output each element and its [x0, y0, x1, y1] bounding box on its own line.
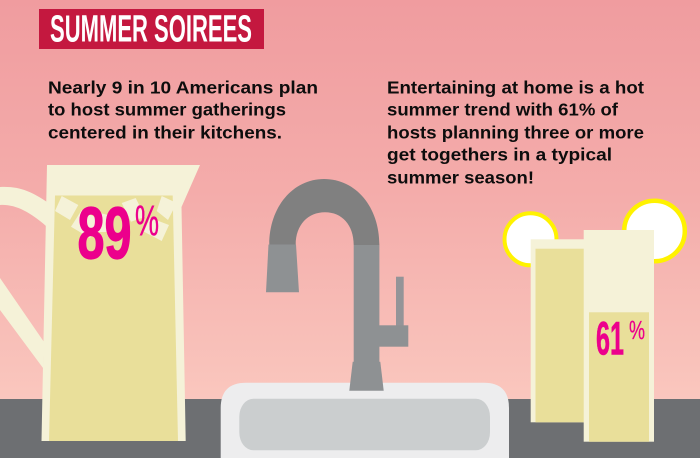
text block: 89 percent statement: Nearly 9 in 10 Americans plan — [48, 77, 318, 97]
title banner: SUMMER SOIREES — [50, 9, 252, 51]
text block: 89 percent statement — [48, 77, 318, 142]
sink — [221, 383, 509, 458]
stat: 89 percent: 89 — [78, 194, 132, 274]
stat: 89 percent: % — [135, 198, 159, 246]
text block: 61 percent statement: summer trend with 61% of — [387, 100, 618, 120]
countertop — [0, 399, 700, 458]
faucet arc — [269, 179, 379, 245]
pitcher body — [42, 165, 200, 441]
pitcher lemonade — [49, 196, 178, 441]
lemon slice right — [624, 201, 685, 261]
lemon slice left — [504, 213, 556, 265]
title banner — [39, 9, 264, 51]
text block: 61 percent statement — [387, 77, 644, 187]
stat: 61 percent: % — [629, 315, 645, 345]
icon: lemonade pitcher — [0, 165, 200, 441]
text block: 61 percent statement: hosts planning three or more — [387, 122, 644, 142]
front glass lemonade — [589, 312, 649, 442]
faucet stem — [354, 245, 379, 363]
back glass — [531, 239, 585, 422]
faucet lever — [396, 277, 404, 327]
stat: 61 percent: 61 — [596, 312, 624, 365]
faucet base — [349, 362, 384, 391]
icon: lemonade glasses — [504, 201, 685, 442]
faucet head — [266, 244, 299, 292]
text block: 61 percent statement: summer season! — [387, 167, 534, 187]
sink basin — [239, 399, 490, 450]
pitcher handle — [0, 187, 47, 368]
sink rim — [221, 383, 509, 458]
text block: 89 percent statement: to host summer gatherings — [48, 100, 286, 120]
text block: 89 percent statement: centered in their kitchens. — [48, 122, 282, 142]
faucet handle — [379, 325, 408, 347]
front glass — [584, 230, 654, 442]
ice cubes — [55, 196, 177, 241]
back glass lemonade — [536, 249, 584, 422]
text block: 61 percent statement: get togethers in a typical — [387, 145, 612, 165]
text block: 61 percent statement: Entertaining at home is a hot — [387, 77, 644, 97]
icon: faucet — [266, 179, 408, 363]
